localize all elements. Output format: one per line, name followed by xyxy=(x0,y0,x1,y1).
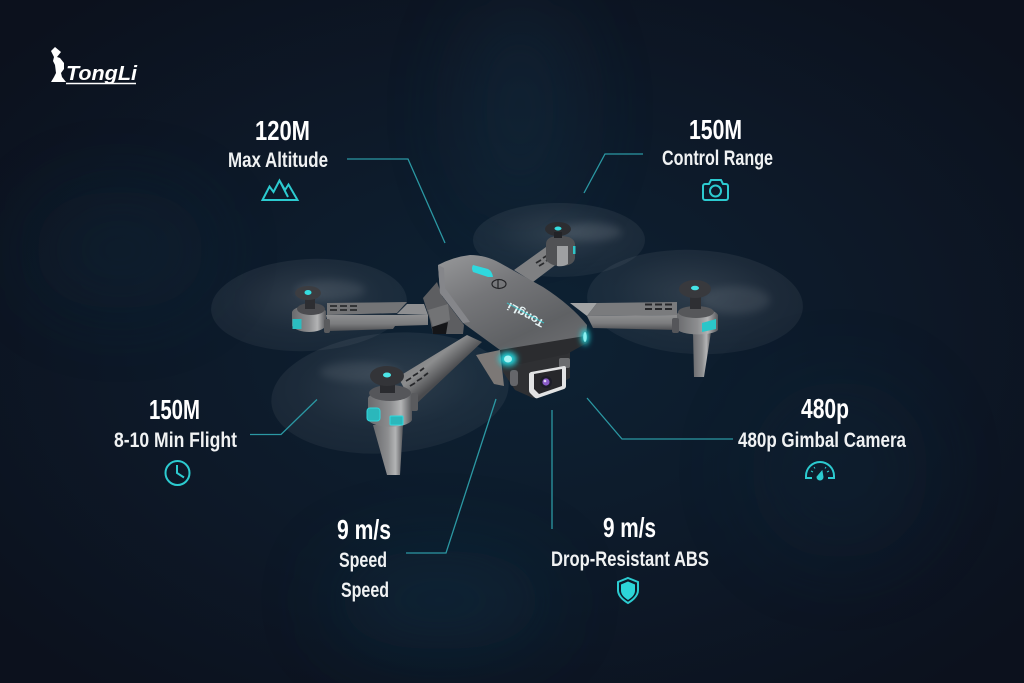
callout: 480p Gimbal Camera xyxy=(587,393,906,480)
callout: 8-10 Min Flight: 150M xyxy=(149,394,200,425)
callout: Speed: Speed xyxy=(339,549,387,572)
callout: Control Range: Control Range xyxy=(662,147,773,170)
callout: Speed xyxy=(337,399,496,602)
callout: Control Range xyxy=(584,114,773,200)
callout: Max Altitude: 120M xyxy=(255,115,310,146)
callout: 480p Gimbal Camera: 480p xyxy=(801,393,849,424)
front bumper xyxy=(500,336,587,364)
top LED strip xyxy=(472,265,493,277)
callout: Speed: Speed xyxy=(341,579,389,602)
callout: 8-10 Min Flight: 8-10 Min Flight xyxy=(114,429,237,452)
power badge xyxy=(492,280,506,288)
right motor and leg xyxy=(672,280,718,377)
callout: Drop-Resistant ABS xyxy=(551,410,709,603)
callout: 8-10 Min Flight xyxy=(114,394,317,485)
rotor blur discs xyxy=(209,203,806,463)
body top shell xyxy=(438,255,587,356)
callout: Drop-Resistant ABS: 9 m/s xyxy=(603,512,656,543)
callout: 480p Gimbal Camera: 480p Gimbal Camera xyxy=(738,429,906,452)
callout: Speed: 9 m/s xyxy=(337,514,391,545)
callout: Drop-Resistant ABS: Drop-Resistant ABS xyxy=(551,548,709,571)
right arm xyxy=(570,302,677,330)
callout: Max Altitude xyxy=(228,115,445,243)
callout: Max Altitude: Max Altitude xyxy=(228,149,328,172)
body underside and camera housing xyxy=(476,350,570,398)
drone xyxy=(292,222,718,475)
camera xyxy=(529,366,566,398)
callout: Control Range: 150M xyxy=(689,114,742,145)
left arm xyxy=(326,302,428,331)
front left arm xyxy=(398,335,482,406)
logo: TongLi xyxy=(51,47,137,85)
body side panel xyxy=(438,265,470,323)
rear right arm and motor xyxy=(514,222,576,282)
front left motor and leg xyxy=(367,366,418,475)
body brand mark: TongLi xyxy=(505,300,546,329)
body rear shell xyxy=(423,282,464,334)
left motor xyxy=(292,286,330,333)
front LEDs xyxy=(499,329,589,366)
logo: TongLi: TongLi xyxy=(66,63,137,85)
